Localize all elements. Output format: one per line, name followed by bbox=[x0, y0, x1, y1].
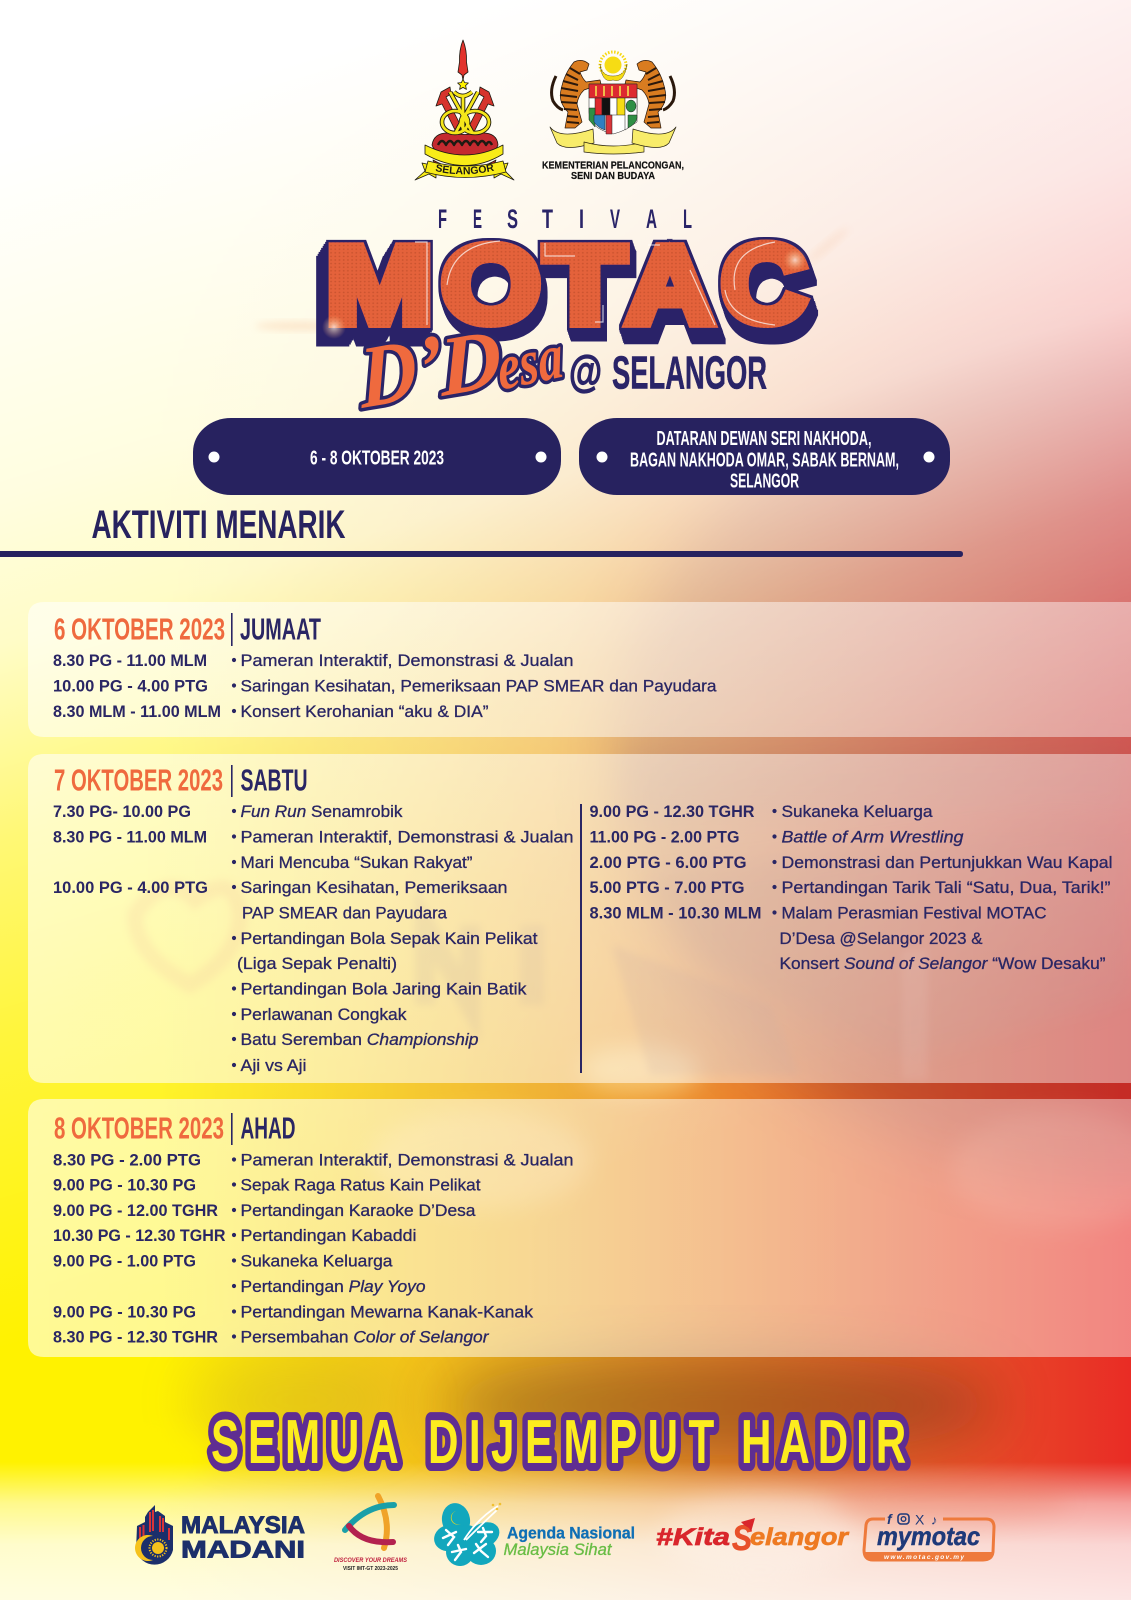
schedule rows: Persembahan Color of Selangor bbox=[240, 1328, 490, 1346]
schedule right column: Pertandingan Tarik Tali “Satu, Dua, Tarik!” bbox=[782, 878, 1111, 897]
schedule right column: 2.00 PTG - 6.00 PTG bbox=[590, 853, 746, 872]
schedule rows: 8.30 PG - 2.00 PTG bbox=[53, 1150, 201, 1170]
icon: hibiscus bbox=[431, 1501, 504, 1569]
subtitle: D'Desa script: D’ bbox=[356, 315, 446, 428]
schedule left column: Saringan Kesihatan, Pemeriksaan bbox=[240, 878, 508, 897]
schedule left column: Perlawanan Congkak bbox=[240, 1005, 407, 1024]
scroll bbox=[550, 127, 676, 154]
heading rule bbox=[0, 551, 963, 557]
logo: Agenda Nasional Malaysia Sihat bbox=[431, 1501, 635, 1569]
sun and crescent bbox=[600, 52, 627, 81]
schedule right column: Battle of Arm Wrestling bbox=[782, 828, 964, 846]
crest ribbon text: SELANGOR bbox=[436, 164, 494, 174]
title: MOTAC: T bbox=[545, 223, 625, 347]
wordmark: MADANI bbox=[181, 1536, 305, 1563]
title highlights bbox=[322, 241, 807, 339]
schedule left column: Pameran Interaktif, Demonstrasi & Jualan bbox=[240, 828, 574, 846]
heading: Aktiviti Menarik: AKTIVITI MENARIK bbox=[92, 503, 346, 547]
heading: FESTIVAL bbox=[438, 204, 692, 234]
pill: date bbox=[193, 418, 561, 495]
schedule left column: Aji vs Aji bbox=[240, 1056, 306, 1075]
schedule right column: 5.00 PTG - 7.00 PTG bbox=[590, 878, 744, 897]
banner: Semua Dijemput Hadir bbox=[211, 1408, 906, 1477]
wordmark: MALAYSIA bbox=[181, 1512, 305, 1539]
schedule left column: Fun Run Senamrobik bbox=[240, 802, 403, 821]
logo: Agenda Nasional Malaysia Sihat: Agenda Nasional bbox=[507, 1524, 635, 1542]
schedule left column: Batu Seremban Championship bbox=[240, 1030, 478, 1049]
logo: Malaysia coat of arms bbox=[550, 52, 676, 154]
pill: date: 6 - 8 OKTOBER 2023 bbox=[310, 448, 444, 470]
schedule rows: 9.00 PG - 1.00 PTG bbox=[53, 1252, 196, 1270]
date heading: 8 OKTOBER 2023 bbox=[54, 1110, 224, 1146]
schedule right column: Demonstrasi dan Pertunjukkan Wau Kapal bbox=[782, 853, 1112, 872]
heading: FESTIVAL: S bbox=[507, 204, 518, 234]
pill: venue: SELANGOR bbox=[730, 470, 799, 492]
schedule right column: Konsert Sound of Selangor “Wow Desaku” bbox=[780, 954, 1106, 973]
schedule right column: 11.00 PG - 2.00 PTG bbox=[590, 828, 740, 846]
subtitle: D'Desa script: esa bbox=[494, 319, 566, 404]
heading: FESTIVAL: I bbox=[579, 204, 584, 234]
ministry name: SENI DAN BUDAYA bbox=[571, 170, 655, 182]
logo: Visit IMT-GT bbox=[334, 1496, 407, 1572]
schedule left column: Mari Mencuba “Sukan Rakyat” bbox=[240, 853, 473, 872]
title: MOTAC: C bbox=[721, 223, 807, 346]
date heading: 7 OKTOBER 2023 bbox=[54, 762, 223, 798]
date heading: 6 OKTOBER 2023 bbox=[54, 612, 225, 646]
wordmark bbox=[181, 1512, 305, 1563]
panel: 7 Oktober bbox=[28, 754, 1131, 1083]
title: MOTAC bbox=[326, 223, 807, 347]
schedule rows: Pertandingan Kabaddi bbox=[240, 1226, 416, 1245]
schedule rows: Sukaneka Keluarga bbox=[240, 1252, 393, 1270]
heading: FESTIVAL: V bbox=[610, 204, 620, 234]
icon: hand emblem bbox=[135, 1505, 173, 1565]
subtitle: D'Desa script bbox=[356, 311, 566, 428]
logo: mymotac: www.motac.gov.my bbox=[884, 1554, 964, 1561]
date heading: AHAD bbox=[240, 1110, 296, 1146]
panel: 8 Oktober bbox=[28, 1099, 1131, 1357]
light streaks behind title bbox=[255, 225, 850, 330]
schedule left column: Pertandingan Bola Jaring Kain Batik bbox=[240, 980, 527, 998]
schedule right column: Malam Perasmian Festival MOTAC bbox=[782, 904, 1046, 922]
schedule rows: 8.30 PG - 11.00 MLM bbox=[53, 651, 207, 670]
schedule right column: Sukaneka Keluarga bbox=[782, 802, 933, 821]
ministry name bbox=[542, 160, 684, 182]
schedule rows: Sepak Raga Ratus Kain Pelikat bbox=[240, 1176, 481, 1194]
subtitle: @ SELANGOR bbox=[569, 346, 767, 398]
schedule left column: Pertandingan Bola Sepak Kain Pelikat bbox=[240, 929, 538, 948]
schedule rows: 9.00 PG - 10.30 PG bbox=[53, 1302, 196, 1322]
column divider bbox=[580, 804, 582, 1073]
schedule left column: 7.30 PG- 10.00 PG bbox=[53, 802, 191, 821]
icon: S arrow: S bbox=[732, 1519, 752, 1558]
schedule left column: (Liga Sepak Penalti) bbox=[237, 954, 397, 973]
schedule right column: D’Desa @Selangor 2023 & bbox=[780, 929, 983, 948]
banner: Semua Dijemput Hadir: HADIR bbox=[741, 1408, 906, 1477]
schedule rows: Pertandingan Play Yoyo bbox=[240, 1277, 426, 1296]
ministry name: KEMENTERIAN PELANCONGAN, bbox=[542, 160, 684, 172]
subtitle: D'Desa script: D bbox=[436, 311, 504, 415]
title: MOTAC: O bbox=[441, 223, 541, 346]
schedule left column: 10.00 PG - 4.00 PTG bbox=[53, 878, 208, 897]
logo: mymotac bbox=[864, 1511, 994, 1561]
pill: venue bbox=[579, 418, 950, 495]
pill: venue: DATARAN DEWAN SERI NAKHODA, bbox=[656, 428, 872, 450]
heading: FESTIVAL: E bbox=[473, 204, 482, 234]
logo: Agenda Nasional Malaysia Sihat: Malaysia Sihat bbox=[504, 1541, 613, 1559]
schedule rows: 8.30 MLM - 11.00 MLM bbox=[53, 702, 221, 721]
schedule rows: Pameran Interaktif, Demonstrasi & Jualan bbox=[240, 1150, 574, 1170]
title: MOTAC: M bbox=[326, 225, 433, 347]
logo: #KitaSelangor bbox=[656, 1518, 850, 1558]
schedule rows: Pameran Interaktif, Demonstrasi & Jualan bbox=[240, 651, 574, 670]
banner: Semua Dijemput Hadir: SEMUA bbox=[211, 1408, 399, 1477]
schedule rows: 8.30 PG - 12.30 TGHR bbox=[53, 1328, 218, 1346]
banner: Semua Dijemput Hadir: DIJEMPUT bbox=[428, 1408, 714, 1477]
social icons bbox=[887, 1511, 938, 1528]
schedule rows: Pertandingan Karaoke D’Desa bbox=[240, 1201, 476, 1220]
schedule rows: Saringan Kesihatan, Pemeriksaan PAP SMEAR dan Payudara bbox=[240, 676, 717, 696]
schedule left column bbox=[53, 802, 574, 1075]
schedule rows: Konsert Kerohanian “aku & DIA” bbox=[240, 702, 489, 721]
left tiger bbox=[552, 60, 601, 128]
shield bbox=[589, 84, 637, 134]
schedule rows: Pertandingan Mewarna Kanak-Kanak bbox=[240, 1302, 534, 1322]
schedule rows: 9.00 PG - 10.30 PG bbox=[53, 1176, 196, 1194]
schedule right column: 8.30 MLM - 10.30 MLM bbox=[590, 904, 762, 922]
logo: Malaysia Madani bbox=[135, 1505, 305, 1565]
logo: #KitaSelangor: elangor bbox=[750, 1524, 850, 1551]
schedule left column: PAP SMEAR dan Payudara bbox=[242, 904, 448, 922]
title: MOTAC: A bbox=[626, 223, 714, 347]
logo: mymotac: mymotac bbox=[877, 1521, 980, 1551]
heading: FESTIVAL: A bbox=[646, 204, 657, 234]
schedule right column bbox=[590, 802, 1112, 973]
schedule right column: 9.00 PG - 12.30 TGHR bbox=[590, 802, 754, 821]
subtitle: @ SELANGOR: SELANGOR bbox=[612, 346, 767, 398]
social icons: X bbox=[915, 1512, 925, 1528]
schedule left column: 8.30 PG - 11.00 MLM bbox=[53, 828, 207, 846]
panel: 6 Oktober bbox=[28, 602, 1131, 737]
logo: Visit IMT-GT: DISCOVER YOUR DREAMS bbox=[334, 1558, 407, 1564]
social icons: ♪ bbox=[931, 1512, 938, 1528]
date heading: SABTU bbox=[240, 762, 308, 798]
heading: FESTIVAL: L bbox=[683, 204, 692, 234]
icon: brush triangle bbox=[345, 1496, 394, 1548]
logo: #KitaSelangor: #Kita bbox=[656, 1524, 730, 1551]
subtitle: @ SELANGOR: @ bbox=[569, 347, 602, 396]
logo: Selangor crest bbox=[414, 40, 514, 180]
schedule rows bbox=[53, 651, 717, 721]
pill: venue: BAGAN NAKHODA OMAR, SABAK BERNAM, bbox=[630, 450, 899, 472]
schedule rows: 9.00 PG - 12.00 TGHR bbox=[53, 1201, 218, 1220]
right tiger bbox=[625, 60, 674, 128]
heading: FESTIVAL: T bbox=[542, 204, 553, 234]
social icons: f bbox=[887, 1511, 893, 1527]
schedule rows: 10.30 PG - 12.30 TGHR bbox=[53, 1226, 226, 1245]
logo: Visit IMT-GT: VISIT IMT-GT 2023-2025 bbox=[343, 1566, 398, 1572]
schedule rows bbox=[53, 1150, 574, 1346]
heading: FESTIVAL: F bbox=[438, 204, 447, 234]
schedule rows: 10.00 PG - 4.00 PTG bbox=[53, 676, 208, 696]
date heading: JUMAAT bbox=[240, 612, 321, 646]
